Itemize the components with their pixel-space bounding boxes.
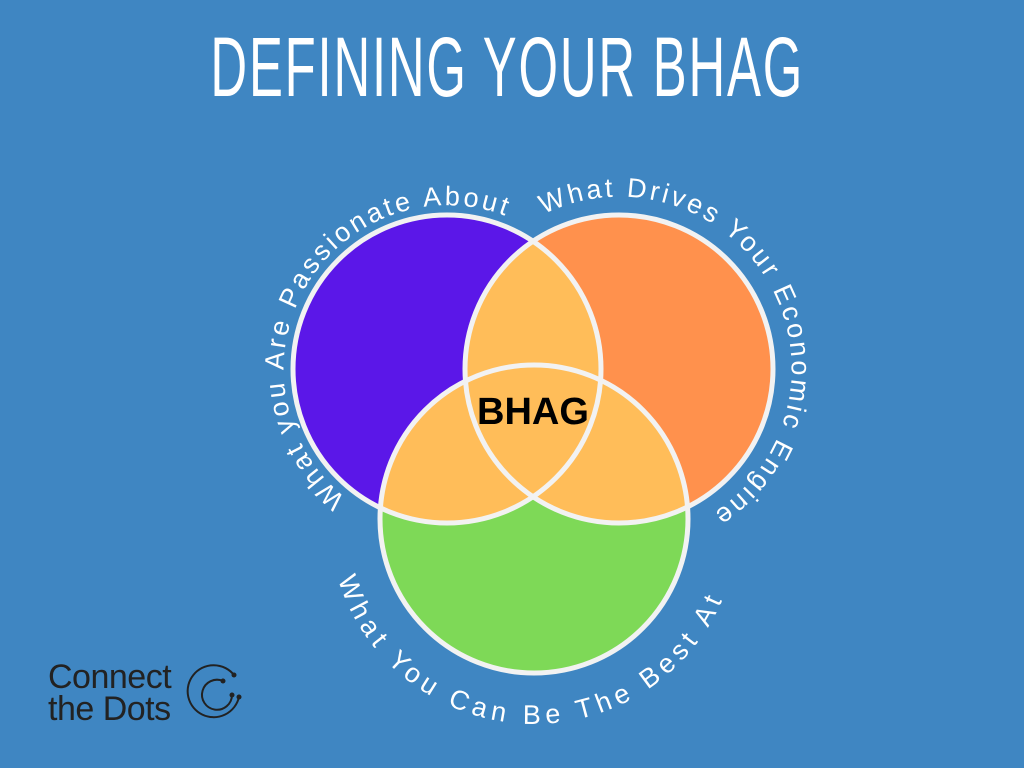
outlines [293, 215, 773, 673]
logo: Connect [48, 658, 171, 696]
venn diagram [265, 178, 807, 724]
label: best at: What You Can Be The Best At [340, 572, 722, 724]
center label: BHAG [477, 391, 589, 433]
label: passion: What you Are Passionate About [265, 186, 510, 512]
logo [48, 658, 242, 728]
circle: orange economic engine [465, 215, 773, 523]
logo: the Dots [48, 690, 171, 728]
label: economic engine: What Drives Your Economic Engine [536, 178, 807, 522]
icon: logo circle [186, 664, 242, 718]
overlap regions [383, 244, 685, 520]
circle: purple passion [293, 215, 601, 523]
circle: green best at [380, 365, 688, 673]
title: DEFINING YOUR BHAG [210, 20, 804, 114]
